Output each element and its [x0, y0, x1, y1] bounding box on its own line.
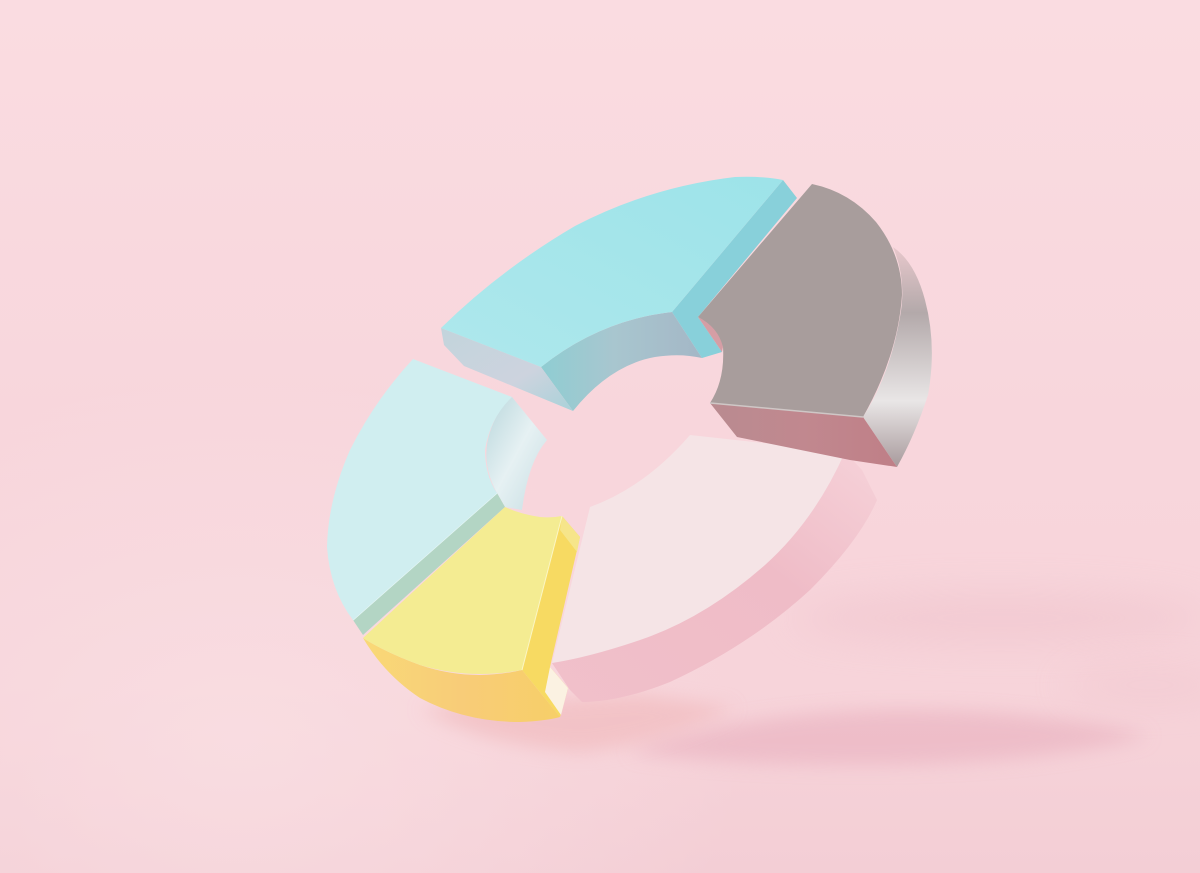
- top face: [327, 359, 512, 620]
- ring segment: yellow: [363, 507, 580, 722]
- lower face: [710, 403, 897, 467]
- lower outer face: [441, 328, 573, 411]
- ring segment: aqua: [441, 177, 797, 411]
- outer right side: [863, 247, 932, 467]
- lower outer face: [363, 638, 560, 722]
- right end face: [522, 516, 580, 717]
- top-right highlight: [560, 516, 580, 552]
- small inner face: [698, 317, 723, 352]
- ring segment: light pink: [552, 435, 877, 702]
- top face: [552, 435, 845, 663]
- ring segment: pale blue: [327, 359, 547, 635]
- top face: [441, 177, 783, 367]
- end face: [353, 493, 505, 635]
- highlight sliver: [545, 667, 568, 715]
- top face: [363, 507, 562, 674]
- inner curved face: [541, 312, 702, 411]
- shadows on the ground: [420, 594, 1200, 765]
- outer side: [552, 452, 877, 702]
- inner curved face: [486, 397, 547, 510]
- top face: [698, 184, 902, 417]
- ring segment: taupe: [698, 184, 932, 467]
- end face: [672, 180, 797, 358]
